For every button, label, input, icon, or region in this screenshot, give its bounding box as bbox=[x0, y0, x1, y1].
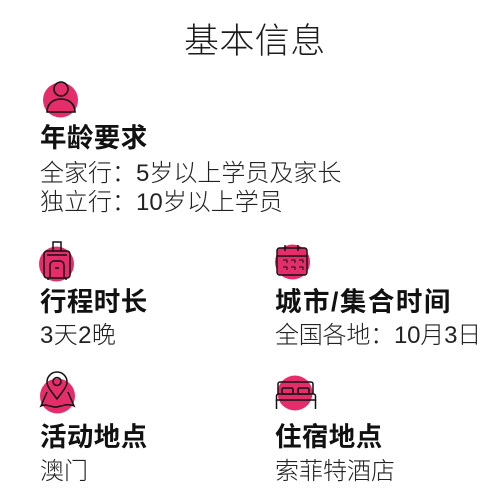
panel: activity location bbox=[40, 371, 148, 485]
text: activity location value: 澳门 bbox=[40, 458, 88, 485]
icon: map pin bbox=[40, 371, 76, 414]
icon: bed bbox=[276, 376, 316, 410]
text: city and time value: 全国各地：10月3日 bbox=[275, 322, 481, 349]
icon: suitcase bbox=[39, 241, 74, 282]
heading: age requirement: 年龄要求 bbox=[40, 123, 148, 153]
heading: accommodation: 住宿地点 bbox=[275, 422, 383, 452]
panel: trip duration bbox=[39, 241, 148, 349]
text: duration value: 3天2晚 bbox=[40, 322, 116, 349]
text: age details bbox=[40, 160, 341, 216]
panel: city and assembly time bbox=[275, 244, 481, 349]
icon: calendar bbox=[275, 244, 310, 280]
heading: city and time: 城市/集合时间 bbox=[275, 287, 452, 317]
text: accommodation value: 索菲特酒店 bbox=[275, 458, 395, 485]
title: 基本信息 bbox=[184, 22, 326, 61]
icon: person bbox=[43, 81, 78, 118]
text: age details: 全家行：5岁以上学员及家长 bbox=[40, 160, 341, 187]
panel: age requirement bbox=[40, 81, 341, 216]
heading: activity location: 活动地点 bbox=[40, 422, 148, 452]
panel: accommodation bbox=[275, 376, 395, 485]
heading: trip duration: 行程时长 bbox=[40, 287, 148, 317]
text: age details: 独立行：10岁以上学员 bbox=[40, 189, 283, 216]
